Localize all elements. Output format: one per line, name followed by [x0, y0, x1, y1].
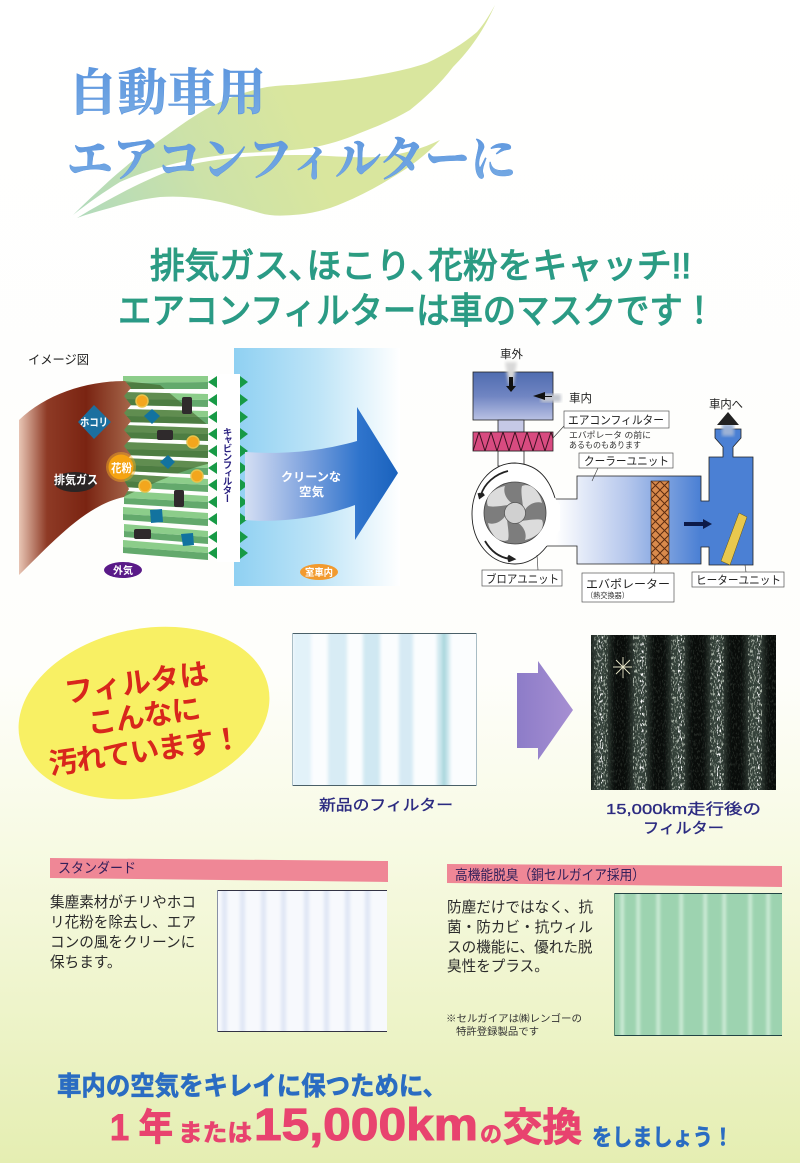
- callout: air conditioning filter: エアコンフィルター: [568, 414, 664, 427]
- description: スの機能に、優れた脱: [447, 939, 593, 956]
- description: 防塵だけではなく、抗: [447, 899, 593, 916]
- subheading line 2: エアコンフィルターは車のマスクです！: [118, 290, 716, 331]
- footnote: ※セルガイアは㈱レンゴーの: [446, 1012, 582, 1025]
- subheading line 1: 排気ガス､ほこり､花粉をキャッチ!!: [150, 247, 691, 286]
- description: 集塵素材がチリやホコ: [50, 894, 196, 911]
- filter photo: [614, 888, 782, 1041]
- footnote: [446, 1012, 582, 1038]
- particles: exhaust: [134, 397, 192, 539]
- icon: upper leaf: [73, 5, 495, 215]
- dust badge: [78, 405, 111, 439]
- footer line 2: [110, 1099, 733, 1150]
- subheading: [118, 247, 716, 331]
- label: outside: 車外: [500, 347, 524, 361]
- panel: air conditioner diagram: [472, 347, 784, 602]
- callout: cooler unit: クーラーユニット: [584, 455, 669, 468]
- indoor air pill: 室車内: [305, 566, 333, 579]
- particles: pollen: [136, 395, 203, 492]
- callout: air conditioning filter: [553, 411, 669, 438]
- callout: heater unit: ヒーターユニット: [696, 574, 781, 587]
- caption: dirty filter: フィルター: [643, 820, 724, 837]
- title line 2: エアコンフィルターに: [67, 132, 516, 187]
- exhaust badge: [54, 472, 98, 492]
- icon: fan: [484, 482, 546, 544]
- footer line 2: 1 年: [110, 1107, 173, 1148]
- footer line 2: をしましょう！: [592, 1124, 733, 1150]
- callout text: フィルタは: [62, 657, 211, 710]
- pollen badge: 花粉: [111, 461, 132, 475]
- polluted air flow: [19, 381, 131, 575]
- particles: dust: [144, 409, 194, 546]
- footnote: 特許登録製品です: [456, 1025, 539, 1038]
- description: コンの風をクリーンに: [50, 934, 195, 951]
- caption: new filter: 新品のフィルター: [319, 797, 453, 814]
- footer line 2: の: [480, 1122, 502, 1147]
- footer message: [57, 1071, 733, 1150]
- pink filter: [473, 432, 553, 451]
- arrow: blower rotation: [479, 471, 513, 561]
- room air panel: [234, 348, 400, 586]
- label: inside: 車内: [569, 391, 592, 405]
- outside air pill: [104, 562, 142, 578]
- description: [447, 899, 593, 975]
- icon: lower leaf: [77, 140, 440, 218]
- header: leaf and title: [67, 5, 516, 218]
- pollen badge: [106, 452, 136, 482]
- footer line 1: 車内の空気をキレイに保つために、: [57, 1071, 447, 1101]
- callout: cooler unit: [579, 453, 673, 481]
- heading band: [50, 858, 388, 882]
- callout: heater unit: [692, 565, 784, 587]
- callout text: こんなに: [85, 693, 203, 741]
- title line 1: 自動車用: [68, 65, 266, 121]
- cabin filter vertical label: キャビンフィルター: [220, 427, 232, 503]
- callout text: [47, 657, 243, 781]
- panel: image diagram of cabin filter: [19, 348, 400, 586]
- description: 保ちます。: [50, 954, 122, 971]
- dust badge: ホコリ: [80, 416, 108, 429]
- footer line 2: 交換: [503, 1107, 582, 1150]
- inlet neck: [498, 420, 524, 432]
- caption: dirty filter: [606, 801, 761, 837]
- outside air pill: 外気: [113, 564, 133, 577]
- new filter photo: [292, 630, 477, 790]
- description: リ花粉を除去し、エア: [50, 914, 196, 931]
- cooler duct: [547, 429, 753, 565]
- callout: blower unit: ブロアユニット: [486, 572, 559, 586]
- clean air label line 2: 空気: [299, 484, 324, 499]
- clean air label: クリーンな: [281, 470, 341, 484]
- evaporator: [651, 481, 669, 564]
- heading band: [447, 864, 782, 887]
- label: to cabin: 車内へ: [709, 397, 743, 411]
- note: filter position: [569, 430, 651, 450]
- footer line 2: 15,000km: [254, 1099, 478, 1150]
- callout: evaporator: （熱交換器）: [586, 590, 629, 600]
- arrow: outlet: [717, 412, 739, 436]
- dirty filter photo: [591, 630, 776, 795]
- callout: evaporator: [582, 564, 674, 602]
- arrow: outside air: [505, 362, 517, 392]
- arrow: clean air: [245, 407, 398, 540]
- note: filter position: あるものもあります: [569, 440, 641, 450]
- inlet box: [473, 372, 553, 420]
- panel: standard filter: [50, 858, 388, 1035]
- footer line 2: または: [178, 1120, 252, 1147]
- description: [50, 894, 196, 971]
- caption: dirty filter: 15,000km走行後の: [606, 801, 761, 818]
- filter teeth: [208, 376, 248, 559]
- arrow: before to after: [517, 661, 573, 760]
- arrow: inside air: [533, 392, 561, 402]
- diagram caption: イメージ図: [28, 353, 89, 367]
- arrow: air through heater: [684, 519, 712, 529]
- callout: blower unit: [482, 555, 562, 586]
- indoor air pill: [300, 564, 338, 580]
- yellow callout: [2, 604, 286, 822]
- lower neck: [498, 451, 524, 466]
- filter pleats: [123, 376, 216, 560]
- note: filter position: エバポレータ の前に: [569, 430, 651, 440]
- heater core: [721, 513, 747, 565]
- description: 臭性をプラス。: [447, 958, 549, 975]
- panel: filter comparison: [18, 626, 776, 834]
- callout: evaporator: エバポレーター: [586, 578, 670, 591]
- blower housing: [472, 463, 560, 564]
- filter photo: [217, 885, 387, 1035]
- callout text: 汚れています！: [47, 722, 243, 781]
- description: 菌・防カビ・抗ウィル: [447, 919, 593, 936]
- exhaust badge: 排気ガス: [54, 472, 98, 487]
- panel: high performance deodorising filter: [446, 864, 782, 1041]
- heading band: 高機能脱臭（銅セルガイア採用）: [455, 867, 645, 883]
- heading band: スタンダード: [58, 860, 136, 876]
